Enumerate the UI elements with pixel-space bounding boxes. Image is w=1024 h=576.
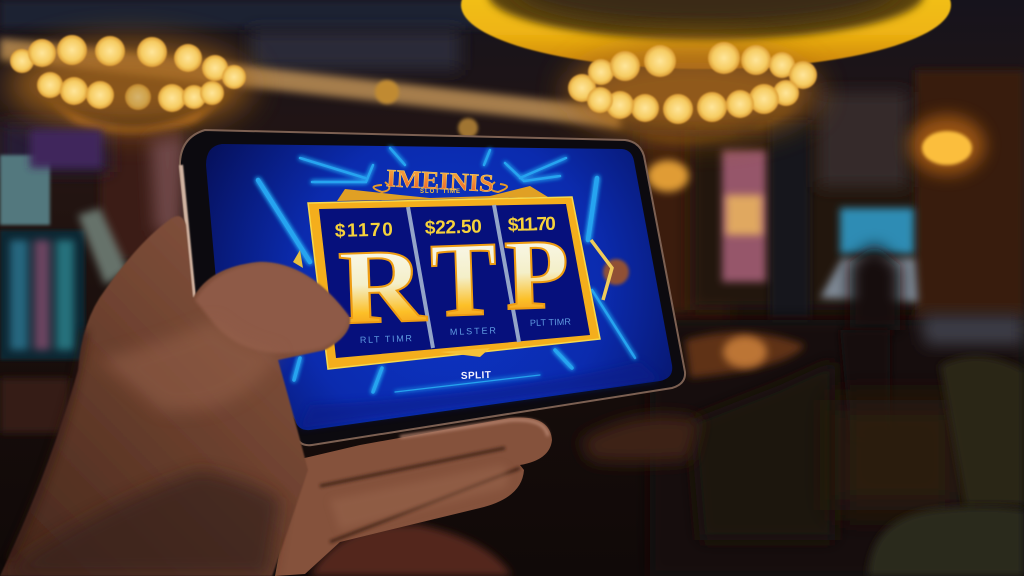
- ceiling ring light: [461, 0, 951, 69]
- RTP letters: T: [429, 220, 499, 339]
- wall lamps: [375, 80, 985, 192]
- phone screen: [206, 144, 672, 430]
- reel captions: PLT TIMR: [530, 317, 572, 328]
- game logo: [337, 165, 548, 201]
- RTP letters: R: [337, 226, 429, 346]
- game logo: SLOT TIME: [420, 189, 460, 195]
- lower fingers: [275, 417, 552, 576]
- right background screen and furniture: [0, 208, 1024, 576]
- phone: [180, 130, 685, 445]
- side chevron: [293, 240, 629, 300]
- palm and thumb: [0, 216, 350, 576]
- game logo: IMEINIS: [385, 165, 495, 198]
- phone body: [180, 130, 685, 445]
- reel values: [335, 214, 556, 242]
- left chandelier: [8, 35, 252, 132]
- blue light rays: [258, 148, 635, 392]
- left slot machine screens: [0, 130, 185, 360]
- RTP letters: P: [503, 218, 571, 331]
- RTP letters: [337, 218, 571, 346]
- spin label: SPLIT: [461, 370, 491, 382]
- reel frame: [308, 197, 600, 369]
- right chandelier: [567, 42, 817, 141]
- reel values: $11.70: [508, 214, 556, 236]
- reel values: $22.50: [425, 217, 482, 239]
- reel values: $1170: [335, 219, 393, 242]
- reel captions: MLSTER: [450, 325, 497, 337]
- hand: [0, 216, 552, 576]
- reel captions: RLT TIMR: [360, 333, 413, 345]
- reel captions: [360, 317, 572, 345]
